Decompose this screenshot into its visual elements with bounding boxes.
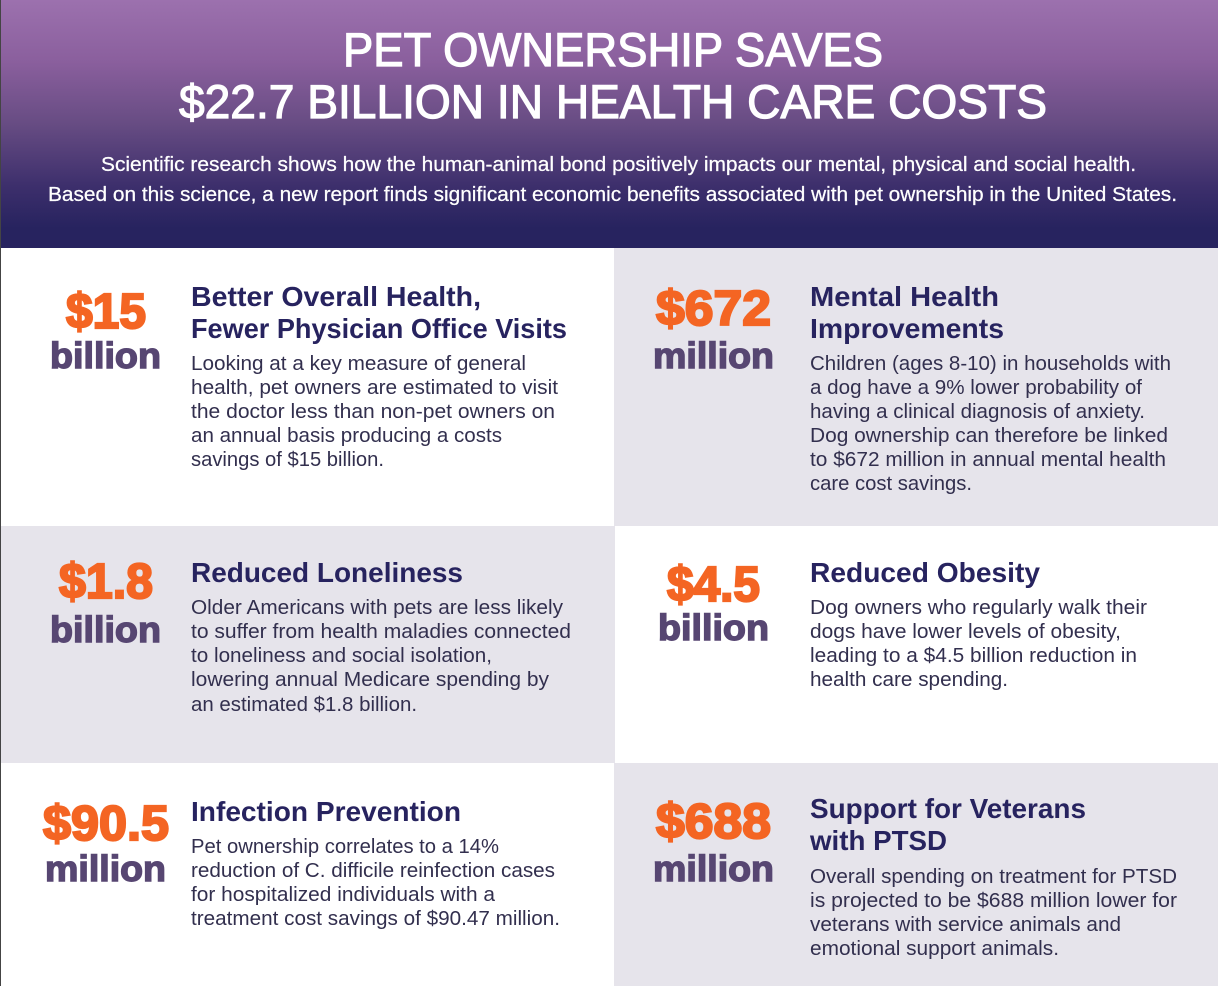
heading: with PTSD: [809, 825, 947, 856]
panel: reduced loneliness: [1, 526, 615, 763]
body text: Children (ages 8-10) in households with: [810, 353, 1171, 375]
heading: Support for Veterans: [810, 793, 1086, 824]
title: [179, 23, 1047, 128]
body text: is projected to be $688 million lower for: [810, 890, 1177, 912]
body text: an estimated $1.8 billion.: [191, 694, 417, 716]
body text: emotional support animals.: [810, 938, 1059, 960]
heading: [810, 281, 1004, 344]
heading: Better Overall Health,: [191, 281, 481, 312]
body text: an annual basis producing a costs: [191, 425, 502, 447]
body text: [191, 597, 571, 716]
stat: $1.8 billion: [50, 555, 161, 650]
body text: health, pet owners are estimated to visit: [191, 377, 558, 399]
body text: lowering annual Medicare spending by: [191, 669, 549, 691]
stat: $4.5 billion: billion: [658, 607, 769, 648]
body text: to loneliness and social isolation,: [191, 645, 492, 667]
body text: Dog owners who regularly walk their: [810, 597, 1147, 619]
heading: Improvements: [810, 313, 1004, 344]
stat: $672 million: million: [653, 335, 774, 376]
body text: Overall spending on treatment for PTSD: [810, 866, 1177, 888]
intro text: Scientific research shows how the human-animal bond positively impacts our mental, physical and social health.: [101, 154, 1136, 176]
title: $22.7 BILLION IN HEALTH CARE COSTS: [179, 75, 1047, 128]
panel: mental health: [614, 248, 1218, 526]
body text: for hospitalized individuals with a: [191, 884, 496, 906]
heading: Fewer Physician Office Visits: [191, 313, 567, 344]
intro text: [48, 154, 1177, 206]
stat: $4.5 billion: [658, 558, 769, 648]
title: PET OWNERSHIP SAVES: [343, 23, 883, 76]
stat: $672 million: $672: [656, 282, 771, 336]
body text: Pet ownership correlates to a 14%: [191, 836, 499, 858]
body text: [810, 353, 1171, 495]
heading: [191, 281, 567, 344]
intro text: Based on this science, a new report finds significant economic benefits associated with pet ownership in the United States.: [48, 184, 1177, 206]
stat: $688 million: million: [653, 848, 774, 889]
body text: [810, 597, 1147, 691]
body text: a dog have a 9% lower probability of: [810, 377, 1142, 399]
heading: Reduced Loneliness: [191, 557, 463, 588]
panel: veterans with PTSD: [614, 763, 1218, 986]
stat: $4.5 billion: $4.5: [667, 558, 760, 612]
heading: Mental Health: [810, 281, 999, 312]
body text: treatment cost savings of $90.47 million.: [191, 908, 560, 930]
stat: $1.8 billion: $1.8: [59, 555, 153, 609]
stat: $90.5 million: million: [45, 848, 166, 889]
body text: leading to a $4.5 billion reduction in: [810, 645, 1137, 667]
body text: [810, 866, 1177, 960]
body text: veterans with service animals and: [810, 914, 1121, 936]
stat: $1.8 billion: billion: [50, 609, 161, 650]
panel: reduced obesity: [615, 526, 1218, 763]
body text: health care spending.: [810, 669, 1008, 691]
body text: care cost savings.: [810, 473, 972, 495]
panel: better overall health: [1, 248, 614, 526]
body text: to suffer from health maladies connected: [191, 621, 571, 643]
stat: $15 billion: [50, 285, 161, 376]
body text: the doctor less than non-pet owners on: [191, 401, 555, 423]
body text: having a clinical diagnosis of anxiety.: [810, 401, 1145, 423]
stat: $15 billion: billion: [50, 335, 161, 376]
body text: dogs have lower levels of obesity,: [810, 621, 1121, 643]
body text: [191, 836, 560, 930]
stat: $688 million: [653, 795, 774, 889]
header banner: [0, 0, 1218, 248]
stat: $90.5 million: [43, 797, 169, 889]
heading: [809, 793, 1086, 856]
body text: reduction of C. difficile reinfection cases: [191, 860, 555, 882]
stat: $688 million: $688: [656, 795, 771, 849]
body text: to $672 million in annual mental health: [810, 449, 1166, 471]
heading: Infection Prevention: [191, 796, 461, 827]
body text: Dog ownership can therefore be linked: [810, 425, 1168, 447]
body text: savings of $15 billion.: [191, 449, 384, 471]
stat: $15 billion: $15: [66, 285, 146, 339]
stat: $90.5 million: $90.5: [43, 797, 169, 851]
body text: Older Americans with pets are less likely: [191, 597, 563, 619]
body text: [191, 353, 558, 471]
heading: Reduced Obesity: [810, 557, 1040, 588]
panel: infection prevention: [1, 763, 615, 986]
stat: $672 million: [653, 282, 774, 376]
body text: Looking at a key measure of general: [191, 353, 526, 375]
